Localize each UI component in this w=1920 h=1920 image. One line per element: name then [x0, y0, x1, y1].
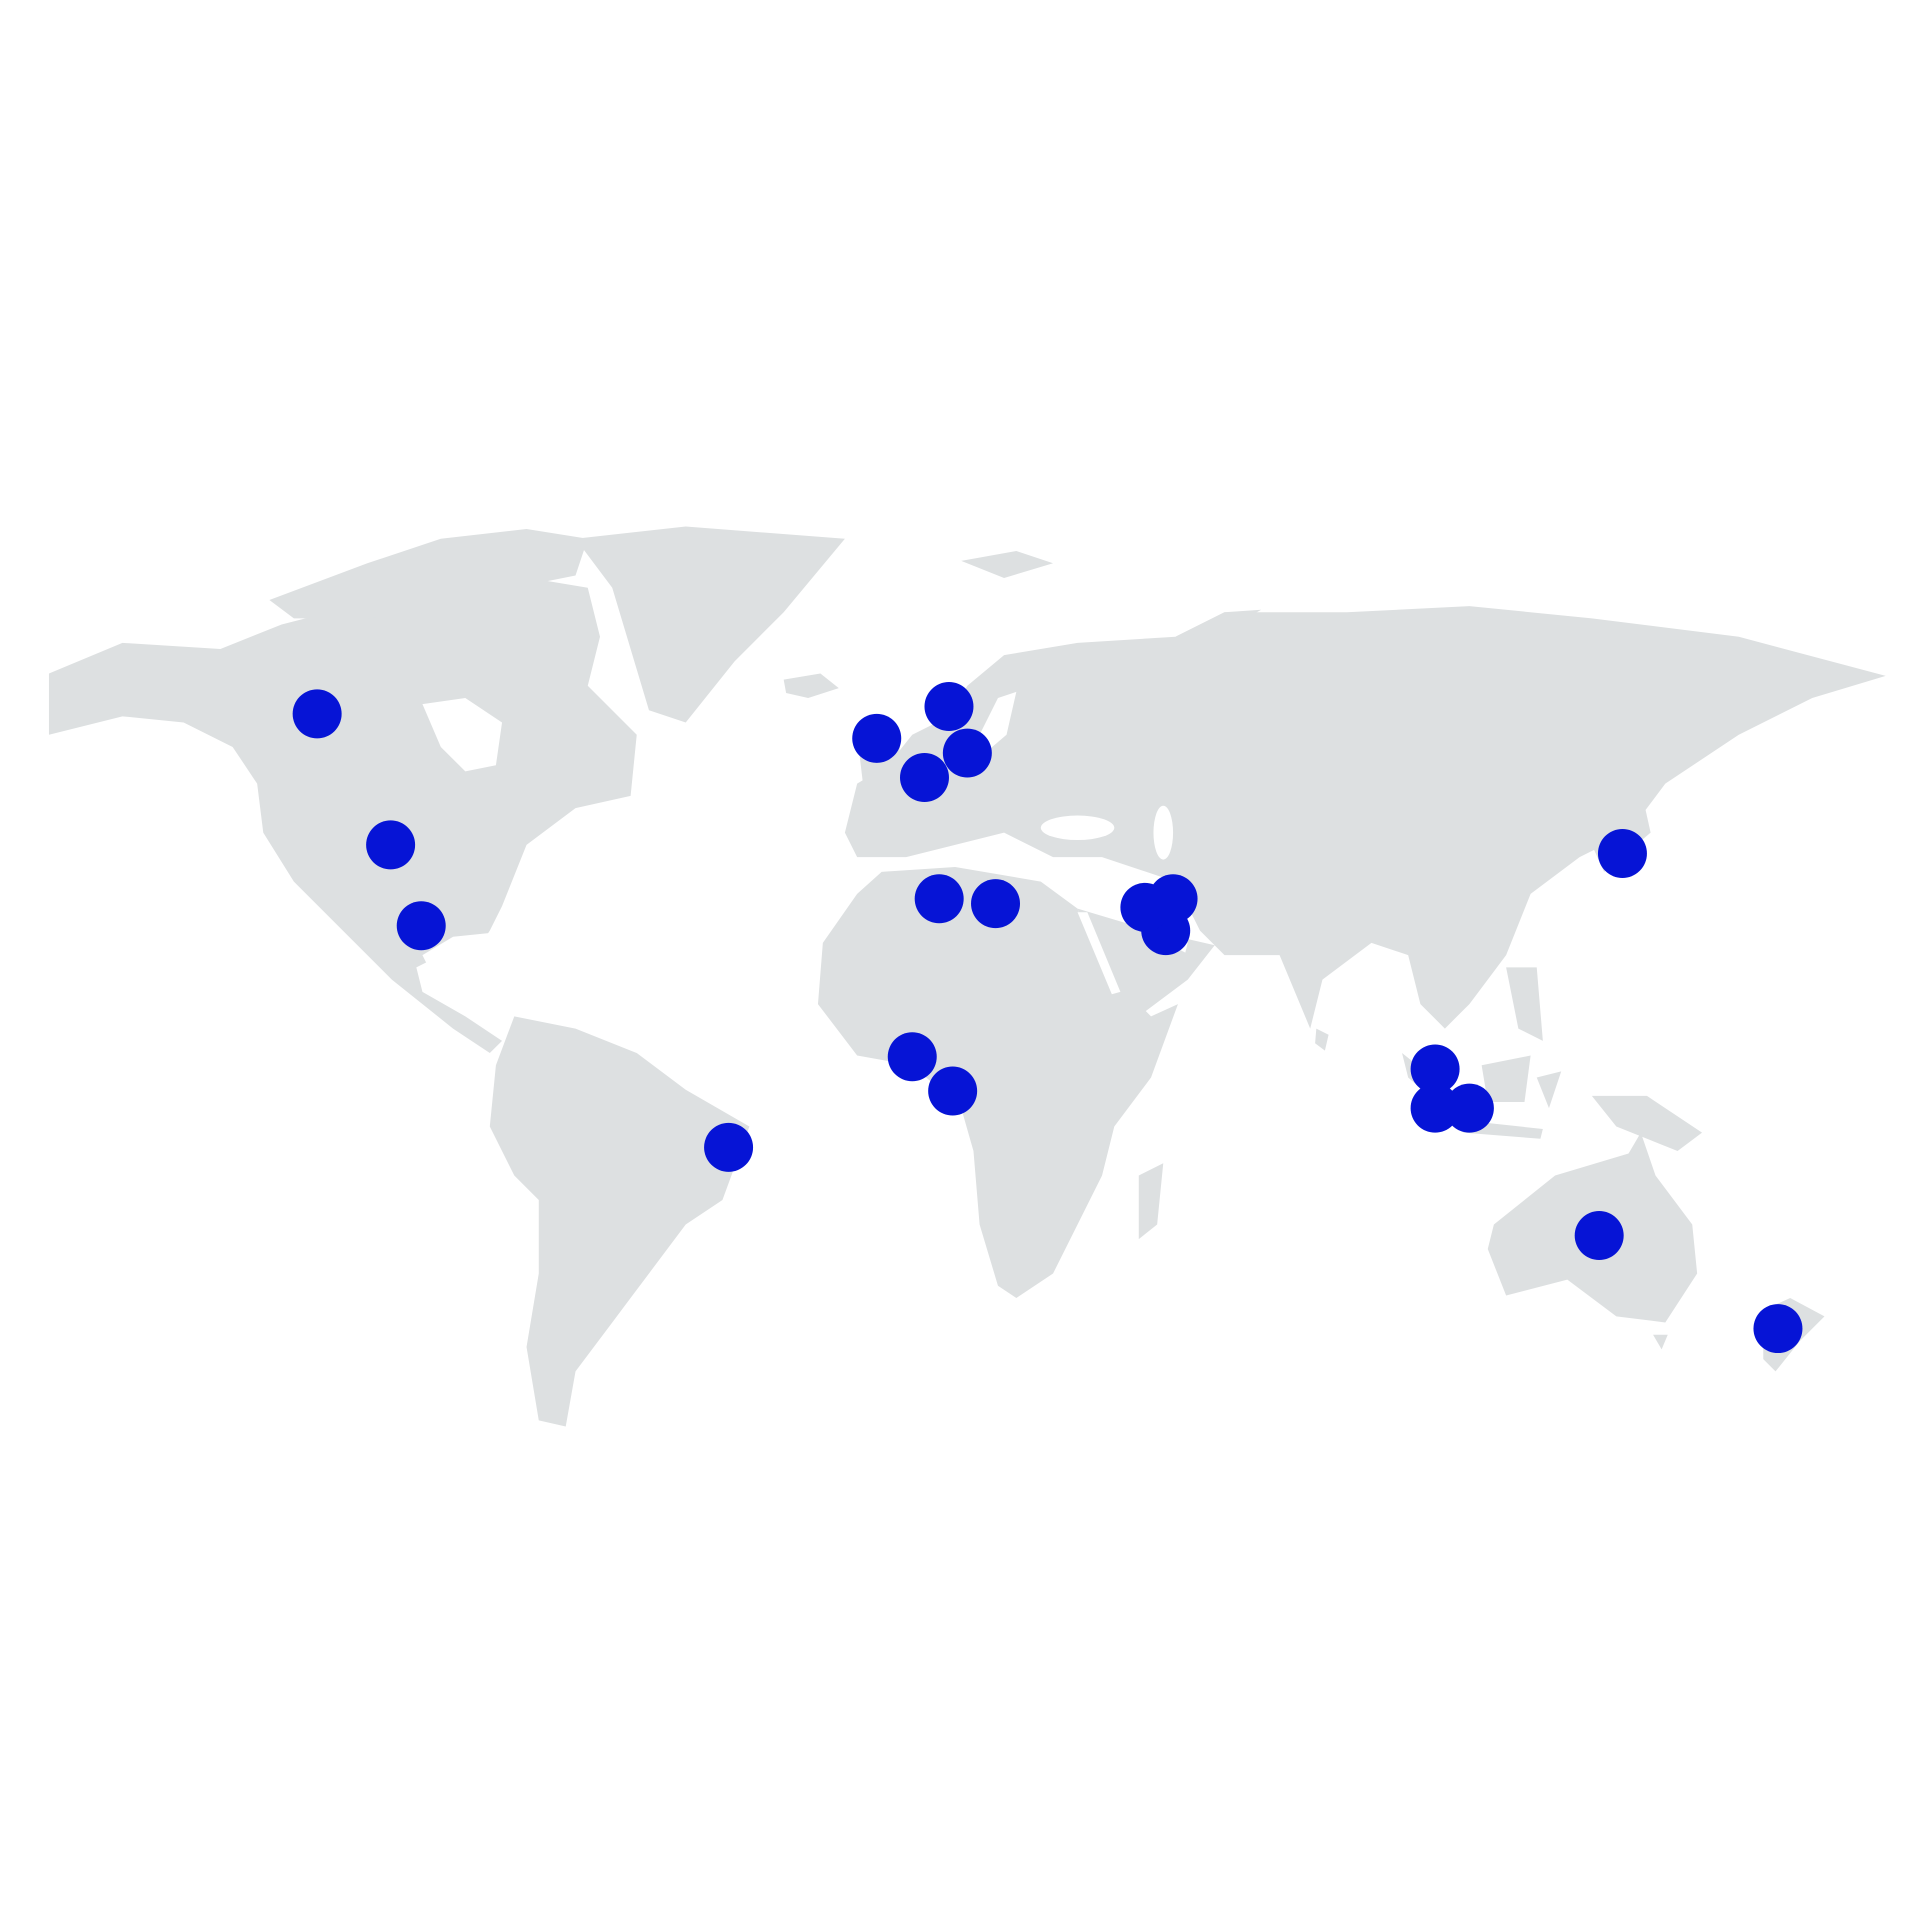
North America: [49, 576, 637, 1053]
Arctic islands Eurasia: [961, 551, 1053, 578]
Madagascar: [1139, 1163, 1163, 1239]
Japan: [1592, 778, 1651, 872]
Baltic: [980, 692, 1016, 749]
Greenland: [576, 527, 845, 722]
UK: [857, 720, 900, 786]
Tasmania: [1653, 1335, 1668, 1349]
New Zealand: [1763, 1298, 1824, 1371]
New Guinea: [1592, 1096, 1702, 1151]
Persian Gulf: [1157, 931, 1188, 953]
land masses: [49, 527, 1886, 1427]
Caspian Sea: [1153, 806, 1173, 860]
Gulf of Mexico: [422, 933, 490, 980]
South America: [490, 1016, 749, 1427]
Black Sea: [1041, 816, 1114, 840]
location markers: [293, 682, 1802, 1353]
Canadian arctic islands: [269, 529, 588, 618]
Red Sea: [1078, 912, 1120, 994]
Australia: [1488, 1133, 1697, 1322]
seas: [422, 692, 1188, 994]
Africa: [818, 867, 1178, 1298]
Eurasia: [845, 606, 1886, 1029]
Sri Lanka: [1315, 1029, 1329, 1051]
Indonesia: [1402, 1053, 1469, 1120]
Arabia: [1078, 909, 1215, 1016]
Iceland: [784, 673, 839, 698]
Hudson Bay: [422, 698, 502, 771]
